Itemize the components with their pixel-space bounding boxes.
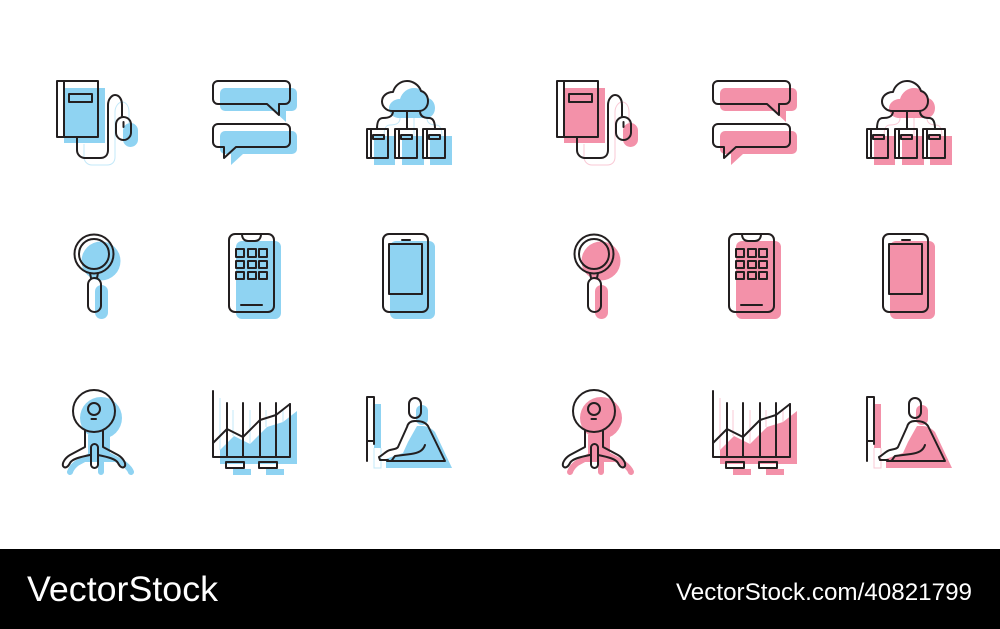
icon: magnifying glass, pink (574, 234, 620, 319)
icon: magnifying glass (74, 234, 120, 319)
image id: VectorStock.com/40821799 (676, 579, 972, 606)
icon: smartphone with app grid, pink (729, 234, 781, 319)
icon: cloud network with servers, pink (867, 81, 952, 165)
icon: chat bubbles (213, 81, 297, 165)
footer band (0, 549, 1000, 629)
panel: blue icon set (57, 81, 452, 475)
icon: person at desk, pink (867, 397, 952, 468)
icon: chat bubbles, pink (713, 81, 797, 165)
icon: smartphone with screen, pink (883, 234, 935, 319)
icon: cloud network with servers (367, 81, 452, 165)
brand name: VectorStock (27, 569, 218, 609)
icon: book with mouse, pink (557, 81, 638, 165)
icon: book with mouse (57, 81, 138, 165)
icon: webcam on tripod, pink (563, 390, 631, 472)
icon: smartphone with screen (383, 234, 435, 319)
icon: webcam on tripod (63, 390, 131, 472)
icon: person at desk (367, 397, 452, 468)
icon: line chart (213, 391, 297, 475)
panel: pink icon set (557, 81, 952, 475)
icon: line chart, pink (713, 391, 797, 475)
icon: smartphone with app grid (229, 234, 281, 319)
